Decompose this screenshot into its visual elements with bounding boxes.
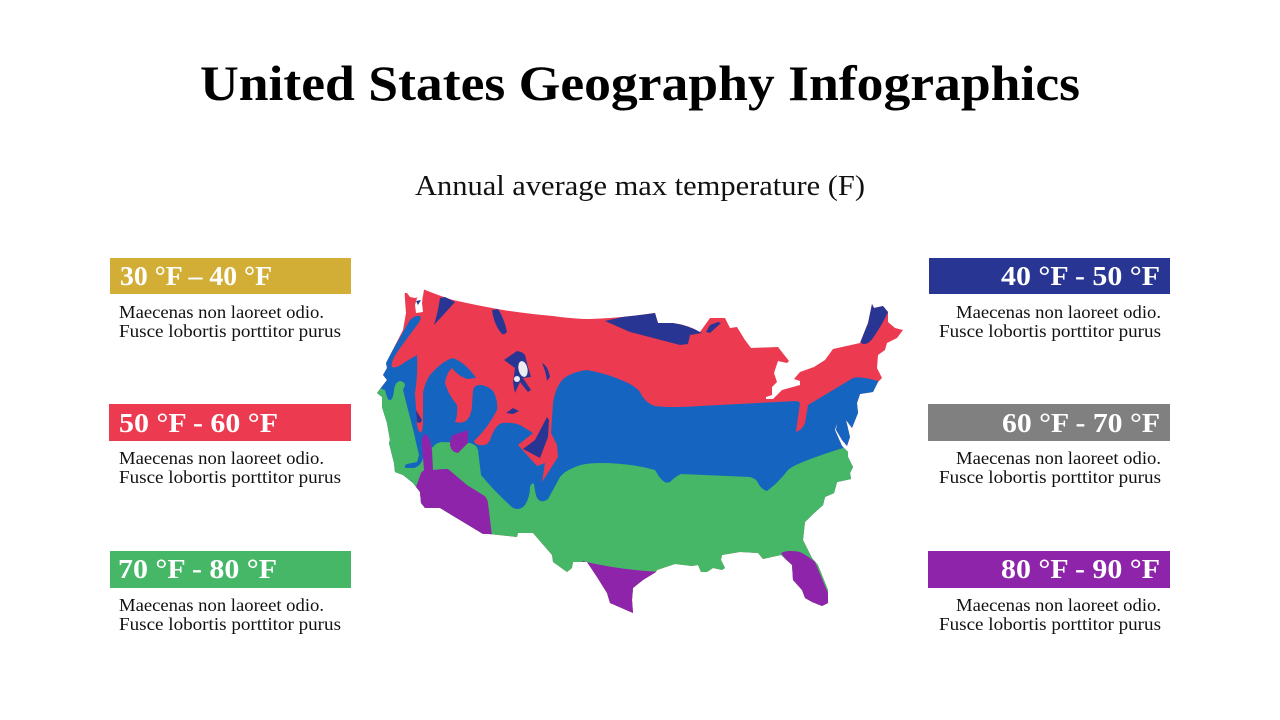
legend: 30 to 40 F: Maecenas non laoreet odio.	[119, 302, 324, 322]
legend: 70 to 80 F: Fusce lobortis porttitor purus	[119, 614, 341, 634]
zone: Maine	[860, 304, 888, 344]
map: United States temperature zones	[370, 280, 910, 620]
legend: 30 to 40 F: 30 °F – 40 °F	[120, 261, 272, 291]
legend: 30 to 40 F: Fusce lobortis porttitor purus	[119, 321, 341, 341]
subtitle: Annual average max temperature (F)	[415, 170, 865, 202]
legend: 50 to 60 F: Maecenas non laoreet odio.	[119, 448, 324, 468]
legend: 60 to 70 F	[928, 404, 1170, 487]
legend: 40 to 50 F	[929, 258, 1170, 341]
legend: 80 to 90 F	[928, 551, 1170, 634]
legend: 40 to 50 F: Fusce lobortis porttitor purus	[939, 321, 1161, 341]
legend: 70 to 80 F: Maecenas non laoreet odio.	[119, 595, 324, 615]
legend: 50 to 60 F	[109, 404, 351, 487]
snow spots	[514, 360, 529, 382]
zone: 80 to 90 F in Florida	[781, 551, 828, 606]
zone: blue hook in southern California	[405, 438, 424, 468]
zone: northern Minnesota	[605, 310, 702, 345]
legend: 40 to 50 F: Maecenas non laoreet odio.	[956, 302, 1161, 322]
title: United States Geography Infographics	[200, 55, 1080, 111]
zone: 80 to 90 F in southern Texas	[582, 561, 656, 613]
zone: 50 to 60 F base	[370, 280, 910, 620]
legend: 70 to 80 F	[110, 551, 351, 634]
legend: 30 to 40 F	[110, 258, 351, 341]
zone: 80 to 90 F in the Southwest	[415, 434, 492, 536]
purple spot over Utah and Arizona	[450, 430, 468, 453]
cold zones: 40 to 50 F	[416, 297, 721, 458]
legend: 80 to 90 F: 80 °F - 90 °F	[1001, 554, 1160, 584]
legend: 80 to 90 F: Maecenas non laoreet odio.	[956, 595, 1161, 615]
legend: 60 to 70 F: Maecenas non laoreet odio.	[956, 448, 1161, 468]
legend: 80 to 90 F: Fusce lobortis porttitor purus	[939, 614, 1161, 634]
legend: 60 to 70 F: Fusce lobortis porttitor purus	[939, 467, 1161, 487]
Puget Sound cutout	[415, 294, 423, 313]
zone: 60 to 70 F	[370, 316, 900, 520]
zone: 70 to 80 F	[377, 381, 853, 613]
legend: 50 to 60 F: 50 °F - 60 °F	[119, 408, 278, 438]
legend: 50 to 60 F: Fusce lobortis porttitor purus	[119, 467, 341, 487]
legend: 70 to 80 F: 70 °F - 80 °F	[118, 554, 277, 584]
legend: 60 to 70 F: 60 °F - 70 °F	[1002, 408, 1160, 438]
legend: 40 to 50 F: 40 °F - 50 °F	[1001, 261, 1160, 291]
